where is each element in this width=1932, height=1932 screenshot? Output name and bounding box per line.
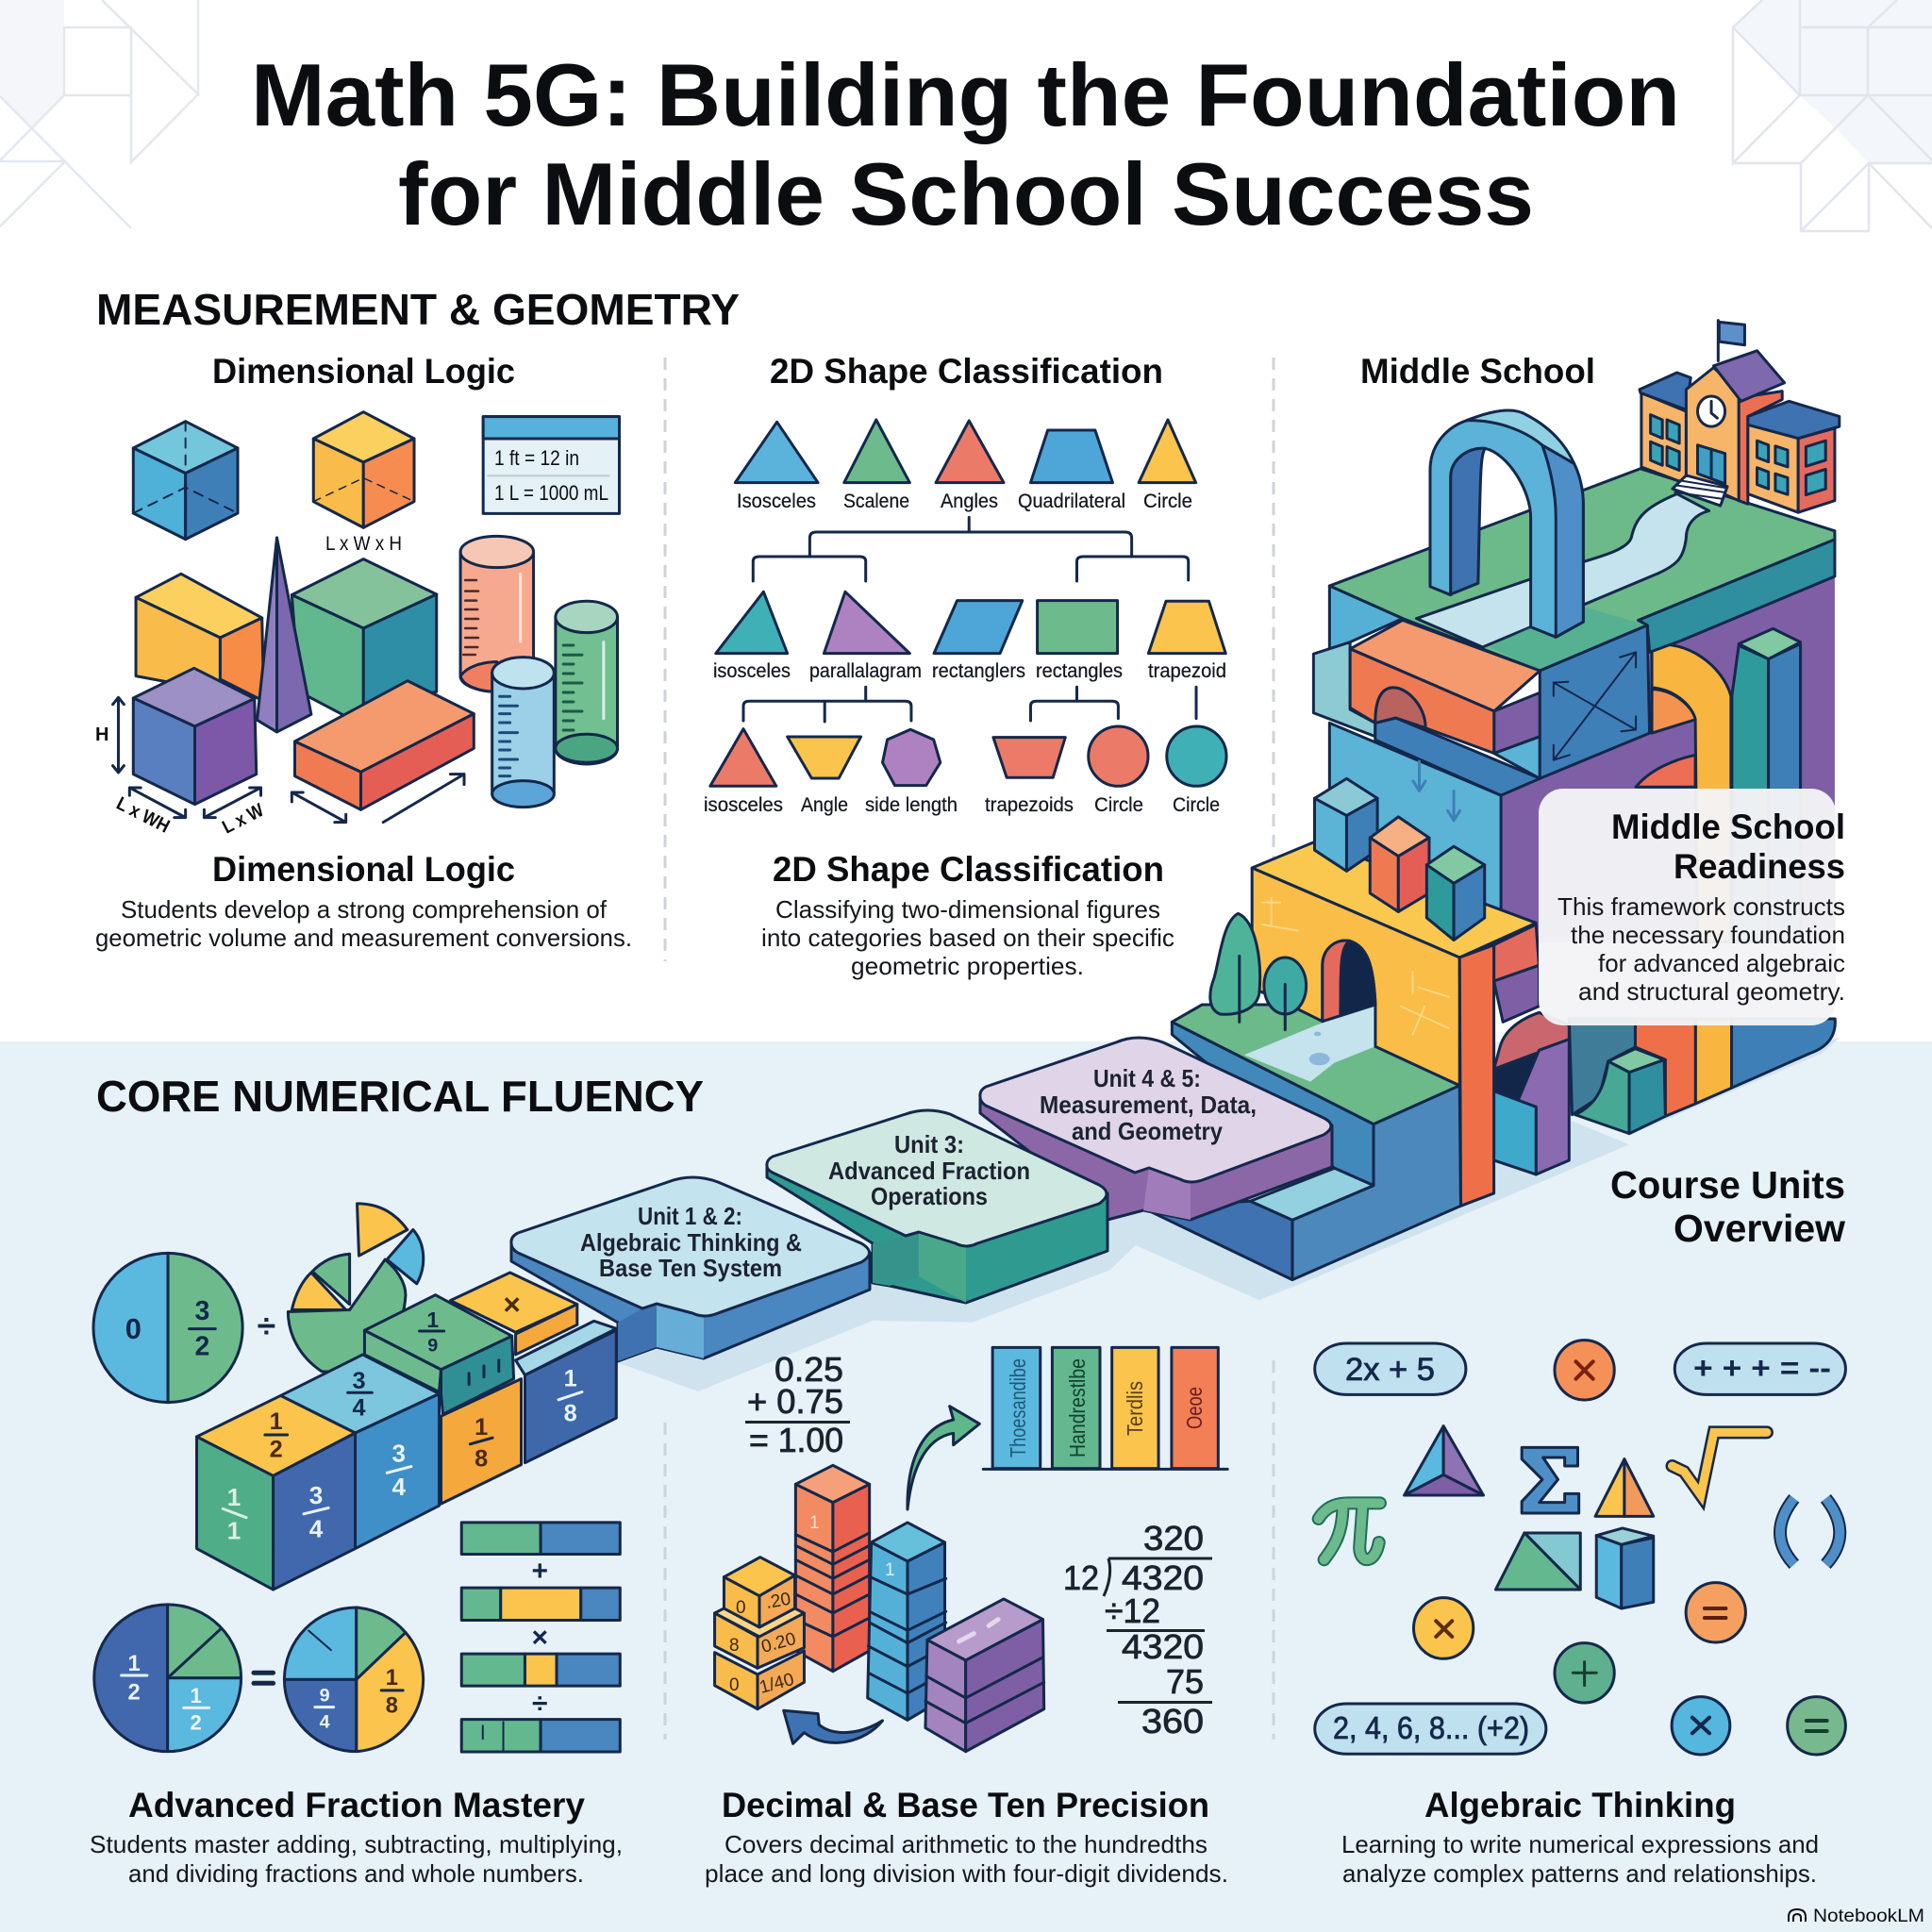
shape labels: parallalagram (809, 660, 922, 682)
long division: 75 (1166, 1662, 1204, 1701)
heading: course units overview: Course Units (1610, 1163, 1845, 1207)
text: dimensional logic body (95, 895, 632, 952)
card text: Unit 1 & 2 (580, 1202, 802, 1282)
callout: middle school readiness (1539, 789, 1845, 1025)
illustration: algebra symbols (1315, 1341, 1845, 1755)
fraction circle: 0 and 3/2: 3 (195, 1296, 209, 1326)
book labels: Thoesandibe (1006, 1358, 1030, 1457)
tetrahedron (1405, 1426, 1483, 1495)
icon: yellow cube (313, 412, 414, 527)
decimal block numbers: 1 (885, 1560, 895, 1580)
pi (1319, 1503, 1380, 1559)
card text: Unit 1 & 2: Algebraic Thinking & (580, 1228, 802, 1257)
purple pyramid (258, 538, 311, 732)
green block (364, 1295, 514, 1414)
text: 2D shape classification body: into categories based on their specific (761, 924, 1174, 952)
orange tower (795, 1465, 870, 1672)
card text: Unit 4 & 5: Measurement, Data, (1040, 1091, 1257, 1119)
blue cube (1315, 778, 1377, 871)
decimal addition: + 0.75 (747, 1382, 843, 1421)
shape labels: Scalene (843, 491, 909, 512)
fraction circle: halves: 2 (191, 1710, 202, 1734)
fraction circle: halves: 1 (127, 1652, 141, 1676)
row 2 shapes (716, 591, 1225, 654)
callout heading: Middle School (1611, 808, 1845, 846)
text: dimensional logic body: geometric volume and measurement conversions. (95, 924, 632, 952)
blue block 3/4: 3 (352, 1368, 366, 1394)
shape labels (704, 491, 1226, 816)
decimal block numbers: 0 (729, 1675, 740, 1695)
illustration: decimal blocks (715, 1347, 1227, 1752)
book labels: Handrestlbe (1065, 1358, 1090, 1457)
card text: Unit 3: Operations (871, 1182, 988, 1210)
text: algebraic thinking: analyze complex patterns and relationships. (1342, 1859, 1817, 1888)
small blocks on yellow ledge (1315, 761, 1485, 940)
place value books (983, 1347, 1227, 1469)
shape labels: Isosceles (737, 491, 816, 512)
pill: expression (1315, 1343, 1466, 1394)
text: advanced fraction mastery: Advanced Fraction Mastery (128, 1786, 585, 1824)
trees (1210, 913, 1307, 1030)
fraction circle: halves: 1 (191, 1684, 202, 1707)
operator: green plus (1555, 1643, 1614, 1703)
callout body (1557, 892, 1845, 1006)
green block: 1 (426, 1307, 439, 1332)
unit conversion box (483, 417, 619, 513)
heading: course units overview: Overview (1674, 1207, 1845, 1250)
green terrace (1172, 1005, 1459, 1124)
yellow box (136, 574, 264, 701)
shape labels: Angle (801, 794, 848, 816)
dark blue band (1375, 718, 1540, 795)
callout body: and structural geometry. (1578, 977, 1845, 1006)
lower blue wall (1329, 723, 1501, 918)
fraction circle: 0 and 3/2: 2 (195, 1331, 209, 1361)
down arrows (1413, 761, 1460, 821)
teal band (1639, 540, 1835, 652)
title: for Middle School Success (398, 144, 1534, 243)
operator: orange equals (1686, 1583, 1745, 1642)
fraction bars: × (531, 1623, 548, 1654)
decimal block numbers: 8 (729, 1636, 740, 1656)
decimal block numbers: 0.20 (759, 1629, 798, 1657)
fraction circle: 0 and 3/2: 0 (125, 1312, 142, 1345)
pill text: sequence: 2, 4, 6, 8... (+2) (1333, 1710, 1529, 1745)
center tower (1686, 351, 1785, 504)
blue block 3/4: 3 (392, 1439, 406, 1467)
illustration: dimensional solids (113, 412, 619, 823)
pill text: 2x + 5: 2x + 5 (1345, 1352, 1435, 1388)
blue arch (1430, 410, 1583, 637)
text: dimensional logic heading: Dimensional Logic (212, 850, 515, 889)
dimension arrows (113, 697, 464, 823)
fraction bars: + (531, 1556, 548, 1587)
text: 2D shape classification body: geometric properties. (851, 952, 1084, 980)
prism (1596, 1528, 1654, 1608)
book labels: Terdlis (1123, 1381, 1147, 1436)
label: 1 ft = 12 in: 1 ft = 12 in (494, 446, 579, 470)
indigo block 1/8: 8 (564, 1401, 577, 1427)
notebooklm mark: NotebookLM (1813, 1907, 1924, 1926)
long division: 320 (1143, 1519, 1204, 1557)
right wing (1748, 401, 1840, 512)
shape labels: rectangles (1036, 660, 1123, 682)
fraction circle: mixed: 8 (386, 1694, 398, 1719)
decimal addition: = 1.00 (749, 1421, 843, 1459)
card text: Unit 4 & 5: Unit 4 & 5: (1093, 1064, 1201, 1092)
yellow arch behind (1636, 644, 1731, 941)
long division: ÷12 (1105, 1591, 1160, 1630)
decimal block numbers: .20 (764, 1590, 792, 1613)
ground shadow of unit cards (619, 1208, 1305, 1391)
long division (1063, 1519, 1212, 1740)
square root (1673, 1432, 1767, 1495)
green cube (291, 559, 437, 715)
callout body: for advanced algebraic (1598, 949, 1845, 977)
green cylinder (556, 601, 618, 764)
green block: 9 (427, 1335, 438, 1356)
illustration: staircase upper level (1313, 321, 1840, 941)
indigo block 1/8: 1 (564, 1366, 577, 1392)
school building (1640, 321, 1840, 512)
label: 1 L = 1000 mL: 1 L = 1000 mL (494, 481, 608, 505)
decimal addition (745, 1350, 850, 1459)
teal cube (1426, 846, 1485, 940)
right columns (1569, 1019, 1835, 1116)
front cube: 1 (227, 1483, 241, 1511)
shape labels: trapezoids (985, 794, 1074, 816)
operator: yellow times (1414, 1598, 1474, 1658)
decimal block numbers: 0 (736, 1598, 746, 1618)
indigo block 1/8 (525, 1330, 616, 1463)
fraction circle: mixed: 4 (320, 1711, 330, 1732)
purple wall (1501, 576, 1835, 941)
decimal block numbers: 1/40 (758, 1670, 796, 1698)
row 1 shapes (735, 420, 1196, 483)
text: algebraic thinking: Learning to write numerical expressions and (1341, 1830, 1819, 1858)
label: L x WH: L x WH (113, 793, 173, 838)
pale top (516, 1321, 616, 1375)
yellow stack (715, 1557, 804, 1709)
callout heading: Readiness (1674, 847, 1845, 886)
icon: blue cube (133, 422, 238, 540)
fraction circle: 0 and 3/2 (93, 1253, 242, 1403)
chart: shape classification tree (710, 420, 1226, 786)
shape labels: Angles (941, 491, 998, 512)
divide sign: ÷ (258, 1307, 275, 1344)
operator: orange times (1555, 1341, 1614, 1400)
operator: blue times (1672, 1697, 1730, 1755)
decimal block numbers: 1 (809, 1513, 820, 1533)
operator: green equals (1788, 1697, 1845, 1755)
orange block 1/8: 8 (475, 1446, 488, 1473)
blue cube face with arrows (1540, 625, 1650, 778)
title (251, 45, 1680, 243)
card: Unit 3 (767, 1110, 1108, 1303)
text: advanced fraction mastery (90, 1786, 623, 1888)
fraction circle: halves: 2 (127, 1681, 141, 1706)
book labels: Oeoe (1182, 1387, 1207, 1429)
blue block 3/4: 4 (352, 1394, 366, 1421)
text: 2D shape classification body (761, 895, 1174, 980)
text: advanced fraction mastery: Students master adding, subtracting, multiplying, (90, 1830, 623, 1858)
entrance steps (1673, 475, 1727, 506)
text: 2D shape classification body: Classifying two-dimensional figures (775, 895, 1160, 924)
salmon cylinder (460, 536, 534, 691)
lower section background (0, 1041, 1932, 1932)
card text: Unit 1 & 2: Unit 1 & 2: (638, 1202, 742, 1230)
sigma (1522, 1447, 1579, 1513)
card text: Unit 3: Unit 3: (894, 1130, 964, 1158)
row 3 shapes (710, 726, 1226, 786)
heading: course units overview (1610, 1163, 1845, 1250)
ground shadow of staircase (1136, 1038, 1840, 1300)
shape labels: isosceles (713, 660, 791, 682)
light blue notch (1494, 737, 1540, 778)
fraction bars: ÷ (532, 1689, 548, 1720)
small green cube (1575, 1049, 1665, 1134)
decimal addition: 0.25 (774, 1350, 843, 1389)
small triangle (1595, 1459, 1654, 1516)
label: H: H (95, 724, 108, 745)
callout body: This framework constructs (1557, 892, 1845, 921)
card: Unit 1 & 2 (511, 1177, 870, 1361)
fraction circle: mixed: 9 (320, 1686, 330, 1707)
card text: Unit 3 (828, 1130, 1030, 1210)
yellow multiply block (450, 1273, 577, 1355)
exploded pie (288, 1204, 424, 1372)
heading: middle school: Middle School (1360, 352, 1595, 391)
section heading: measurement and geometry: MEASUREMENT & GEOMETRY (96, 285, 740, 334)
shape labels: Circle (1143, 491, 1192, 512)
text: algebraic thinking (1341, 1786, 1819, 1888)
orange block (294, 681, 474, 809)
long division: 360 (1141, 1702, 1204, 1740)
purple stack (925, 1599, 1044, 1752)
shape labels: rectanglers (932, 660, 1025, 682)
illustration: fraction blocks (93, 1204, 620, 1752)
fraction circle: halves (94, 1605, 242, 1752)
text: 2D shape classification heading: 2D Shape Classification (773, 850, 1164, 889)
text: decimal and base ten precision: place and long division with four-digit dividends. (705, 1859, 1228, 1888)
green plateau (1329, 469, 1835, 671)
decorative corner pattern left (0, 0, 198, 228)
front cube: 1 (270, 1408, 283, 1435)
triangle and square (1495, 1533, 1580, 1590)
shape labels: Circle (1173, 794, 1220, 816)
long division: 4320 (1122, 1558, 1204, 1597)
blue block 3/4: 4 (392, 1473, 407, 1501)
text: decimal and base ten precision (705, 1786, 1228, 1888)
blue upper wall (1329, 586, 1403, 652)
decorative corner pattern right (1733, 0, 1932, 231)
text: decimal and base ten precision: Decimal & Base Ten Precision (722, 1786, 1209, 1824)
purple cube (133, 668, 257, 805)
orange column (1459, 945, 1494, 1206)
blue tower (868, 1523, 946, 1720)
illustration: staircase lower level (1141, 841, 1835, 1280)
callout heading (1611, 808, 1845, 886)
book labels (1006, 1358, 1207, 1457)
label: L x W: L x W (219, 800, 267, 838)
orange block 1/8 (441, 1379, 522, 1504)
text: algebraic thinking: Algebraic Thinking (1424, 1786, 1736, 1824)
decimal block numbers (729, 1513, 895, 1698)
long division: 12 (1063, 1558, 1099, 1597)
tower (1732, 628, 1801, 941)
flag (1718, 321, 1744, 360)
card text: Unit 4 & 5 (1040, 1064, 1257, 1145)
orange cube (1370, 817, 1429, 911)
card: Unit 4 & 5 (980, 1038, 1332, 1220)
front cube: 4 (309, 1515, 324, 1543)
orange bridge block (1350, 620, 1540, 754)
winding path (1416, 494, 1709, 647)
section heading: core numerical fluency: CORE NUMERICAL FLUENCY (96, 1072, 704, 1121)
fraction circle: mixed: 1 (386, 1666, 398, 1690)
card text: Unit 4 & 5: and Geometry (1072, 1117, 1223, 1145)
label: L x W x H: L x W x H (325, 533, 402, 555)
card text: Unit 3: Advanced Fraction (828, 1157, 1030, 1185)
blue arrow (784, 1710, 882, 1743)
blue block 3/4 (280, 1355, 440, 1549)
left wing (1640, 373, 1690, 484)
shape labels: isosceles (704, 794, 783, 816)
orange block 1/8: 1 (475, 1414, 488, 1441)
shape labels: Circle (1094, 794, 1143, 816)
text: decimal and base ten precision: Covers decimal arithmetic to the hundredths (724, 1830, 1208, 1858)
blue base (1141, 1022, 1461, 1280)
text: dimensional logic body: Students develop a strong comprehension of (121, 895, 608, 924)
front cube (197, 1395, 356, 1590)
yellow multiply block: × (503, 1288, 521, 1322)
card text: Unit 1 & 2: Base Ten System (599, 1254, 782, 1282)
pill text: operators: + + + = -- (1693, 1351, 1831, 1385)
equals sign (254, 1673, 274, 1683)
front cube: 2 (270, 1437, 283, 1463)
tree connectors (743, 517, 1196, 722)
shape labels: side length (865, 794, 958, 816)
text: advanced fraction mastery: and dividing fractions and whole numbers. (128, 1859, 584, 1888)
front cube: 3 (309, 1481, 323, 1509)
fraction circle: mixed (284, 1607, 424, 1752)
fraction bars (461, 1523, 620, 1752)
yellow gate block (1252, 841, 1536, 1086)
light teal ledge (1313, 642, 1375, 737)
shape labels: Quadrilateral (1018, 491, 1125, 512)
green arrow (908, 1407, 979, 1509)
long division: 4320 (1122, 1627, 1204, 1666)
pill: operators (1674, 1343, 1845, 1394)
inner openings (1494, 924, 1569, 1174)
parentheses (1780, 1498, 1840, 1564)
heading: 2D shape classification: 2D Shape Classification (770, 352, 1163, 391)
heading: dimensional logic: Dimensional Logic (212, 352, 515, 391)
shape labels: trapezoid (1148, 660, 1226, 682)
title: Math 5G: Building the Foundation (251, 45, 1680, 144)
pill: sequence (1315, 1704, 1546, 1754)
callout body: the necessary foundation (1571, 921, 1845, 949)
blue cylinder (492, 658, 554, 808)
front cube: 1 (227, 1517, 241, 1545)
